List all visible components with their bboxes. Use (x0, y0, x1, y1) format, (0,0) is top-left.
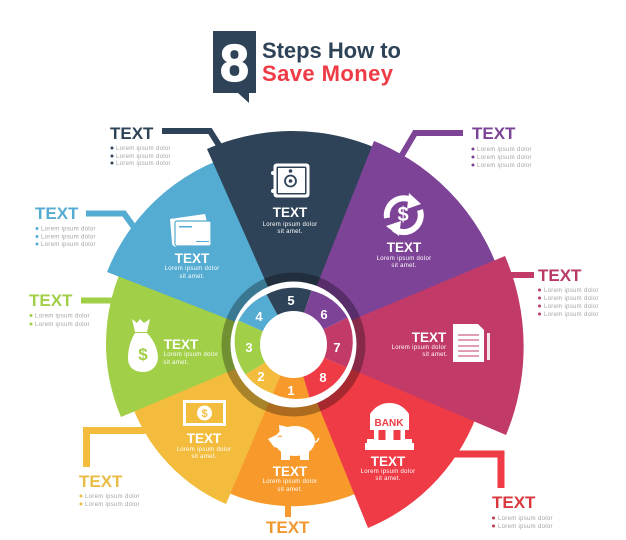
slice text: orange: sit amet. (277, 487, 303, 493)
label: orange: TEXT (266, 518, 310, 537)
slice text: red: Lorem ipsum dolor (361, 469, 415, 475)
slice text: red: TEXT (371, 454, 406, 469)
label: yellow (79, 472, 140, 508)
centre ring (222, 272, 366, 416)
icon: bank building: BANK (375, 418, 404, 429)
slice text: yellow: TEXT (187, 431, 222, 446)
label: blue: TEXT (35, 204, 79, 223)
step numbers: 8 (319, 370, 327, 385)
slice 6 purple (294, 141, 505, 344)
step numbers: 5 (287, 293, 295, 308)
label: pink (538, 266, 599, 318)
icon: banknote: $ (201, 408, 208, 420)
slice 1 orange (196, 344, 390, 506)
label: navy: TEXT (110, 124, 154, 143)
label: red: Lorem ipsum dolor (498, 516, 553, 522)
inner ring segments (235, 288, 353, 399)
slice text: orange (263, 464, 317, 493)
slice 4 blue (107, 150, 294, 344)
slice text: yellow: Lorem ipsum dolor (177, 447, 231, 453)
label: navy: Lorem ipsum dolor (116, 154, 171, 160)
slice text: blue: Lorem ipsum dolor (165, 266, 219, 272)
title line 1: Steps How to (262, 38, 401, 63)
step numbers: 1 (287, 383, 295, 398)
slice text: blue (165, 251, 219, 280)
label: yellow: Lorem ipsum dolor (85, 502, 140, 508)
step numbers: 2 (257, 369, 265, 384)
label: blue (35, 204, 96, 248)
label: pink: Lorem ipsum dolor (544, 312, 599, 318)
slice text: green: sit amet. (163, 360, 189, 366)
step numbers: 7 (333, 340, 341, 355)
label: purple: Lorem ipsum dolor (477, 155, 532, 161)
slice 8 red (294, 344, 480, 528)
slice 7 pink (294, 256, 524, 435)
slice text: navy: TEXT (273, 205, 308, 220)
slice text: pink: Lorem ipsum dolor (392, 345, 446, 351)
slice text: red: sit amet. (375, 476, 401, 482)
icon: bank building (365, 403, 414, 450)
label: purple: Lorem ipsum dolor (477, 147, 532, 153)
label: purple (472, 124, 532, 169)
label: blue: Lorem ipsum dolor (41, 234, 96, 240)
label: green: Lorem ipsum dolor (35, 322, 90, 328)
label: red (492, 493, 553, 530)
icon: credit cards (170, 214, 211, 247)
icon: document and pen (453, 324, 490, 362)
label: navy (110, 124, 171, 167)
step numbers: 3 (245, 340, 253, 355)
slice text: yellow (177, 431, 231, 460)
slice text: orange: Lorem ipsum dolor (263, 479, 317, 485)
slice text: purple: sit amet. (391, 263, 417, 269)
slice text: purple: Lorem ipsum dolor (377, 256, 431, 262)
label: purple: TEXT (472, 124, 516, 143)
pie wheel (106, 131, 524, 528)
label: pink: Lorem ipsum dolor (544, 304, 599, 310)
leader lines (81, 131, 534, 517)
title badge with number 8 (213, 31, 256, 103)
slice text: blue: TEXT (175, 251, 210, 266)
slice text: navy: sit amet. (277, 229, 303, 235)
icon: money exchange arrows (386, 193, 421, 236)
label: blue: Lorem ipsum dolor (41, 226, 96, 232)
slice text: purple (377, 240, 431, 269)
slice text: pink: sit amet. (422, 352, 448, 358)
slice text: green: Lorem ipsum dolor (164, 352, 218, 358)
slice 3 green (106, 232, 294, 417)
label: purple: Lorem ipsum dolor (477, 163, 532, 169)
label: navy: Lorem ipsum dolor (116, 146, 171, 152)
label: red: TEXT (492, 493, 536, 512)
label: pink: TEXT (538, 266, 582, 285)
label: navy: Lorem ipsum dolor (116, 161, 171, 167)
label: yellow: Lorem ipsum dolor (85, 494, 140, 500)
title line 2: Save Money (262, 61, 394, 86)
slice 2 yellow (126, 344, 294, 504)
label: green: Lorem ipsum dolor (35, 314, 90, 320)
step numbers: 4 (255, 309, 263, 324)
icon: money bag (128, 319, 158, 372)
icon: money bag: $ (138, 345, 148, 364)
slice text: pink: TEXT (412, 330, 447, 345)
slice text: purple: TEXT (387, 240, 422, 255)
slice 5 navy (207, 131, 421, 344)
slice text: navy: Lorem ipsum dolor (263, 222, 317, 228)
icon: safe (271, 164, 310, 198)
slice text: orange: TEXT (273, 464, 308, 479)
icon: banknote (184, 402, 224, 424)
title (213, 31, 401, 103)
icon: money exchange arrows: $ (397, 204, 409, 226)
label: red: Lorem ipsum dolor (498, 524, 553, 530)
slice text: pink (392, 330, 448, 358)
step numbers: 6 (320, 307, 328, 322)
slice text: navy (263, 205, 317, 235)
step numbers (245, 293, 341, 398)
label: blue: Lorem ipsum dolor (41, 242, 96, 248)
label: pink: Lorem ipsum dolor (544, 288, 599, 294)
label: pink: Lorem ipsum dolor (544, 296, 599, 302)
label: yellow: TEXT (79, 472, 123, 491)
slice text: red (361, 454, 415, 482)
title badge with number 8: 8 (220, 35, 249, 93)
label: green (29, 291, 90, 328)
slice text: green (163, 337, 218, 366)
slice text: blue: sit amet. (179, 274, 205, 280)
label: green: TEXT (29, 291, 73, 310)
icon: piggy bank (268, 425, 319, 460)
slice text: green: TEXT (164, 337, 199, 352)
slice text: yellow: sit amet. (191, 454, 217, 460)
